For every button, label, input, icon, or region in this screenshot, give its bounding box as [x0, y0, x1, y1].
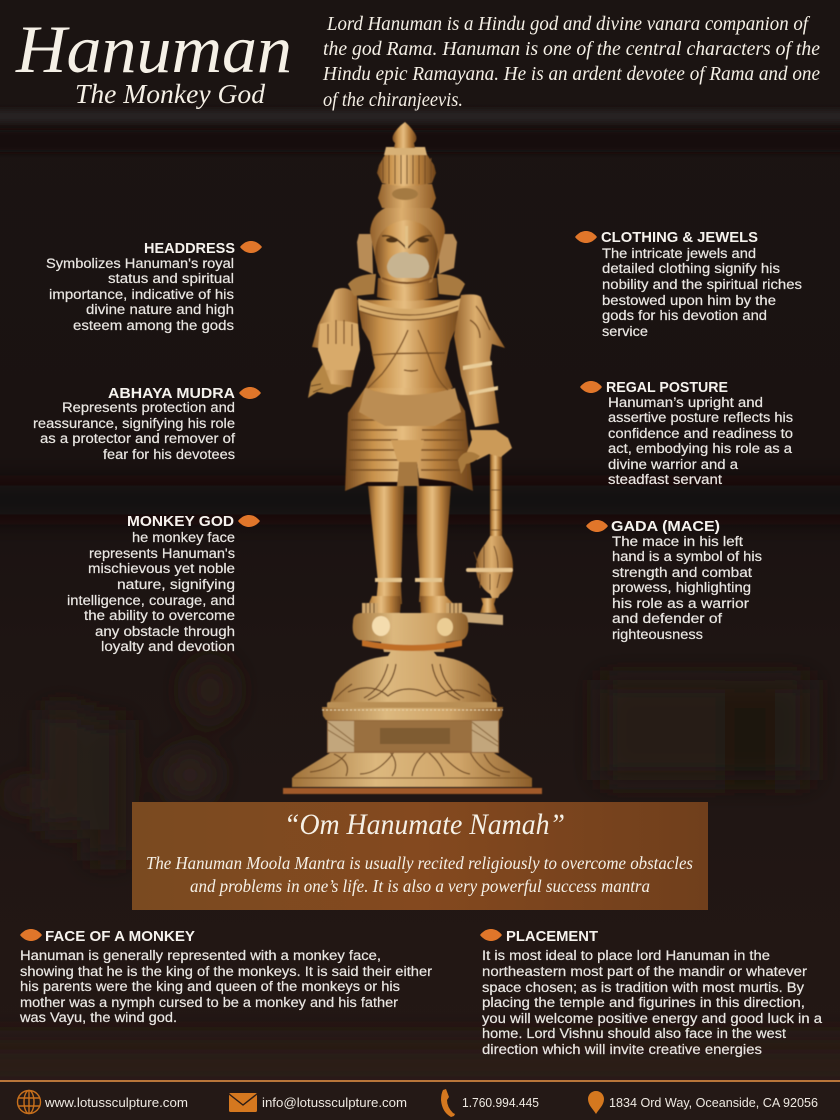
left label: monkey god: MONKEY GOD [127, 513, 234, 530]
bottom section: face of a monkey: mother was a nymph cursed to be a monkey and his father [20, 995, 399, 1010]
left label: abhaya mudra: as a protector and remover of [40, 431, 235, 446]
intro text: Lord Hanuman is a Hindu god and divine vanara companion of [326, 14, 810, 35]
right label: gada mace [586, 518, 762, 642]
bottom section: placement: placing the temple and figurines in this direction, [482, 995, 805, 1010]
bottom section: placement: home. Lord Vishnu should also face in the west [482, 1026, 786, 1041]
icon: lotus leaf [575, 231, 597, 243]
neck [377, 278, 438, 301]
mace [462, 452, 513, 625]
footer contact bar: 1834 Ord Way, Oceanside, CA 92056 [609, 1096, 818, 1110]
icon: phone [441, 1089, 455, 1117]
bottom section: placement: PLACEMENT [506, 928, 598, 945]
bottom section: placement: It is most ideal to place lord Hanuman in the [482, 948, 770, 963]
right label: regal posture: Hanuman’s upright and [608, 395, 763, 410]
right label: regal posture: divine warrior and a [608, 457, 739, 472]
left label: monkey god: any obstacle through [95, 624, 235, 639]
left label: monkey god: intelligence, courage, and [67, 593, 235, 608]
left label: abhaya mudra: Represents protection and [62, 400, 235, 415]
footer contact bar [18, 1089, 818, 1117]
footer contact bar: www.lotussculpture.com [44, 1096, 188, 1110]
right label: clothing and jewels [575, 229, 802, 339]
right label: gada mace: The mace in his left [612, 534, 743, 549]
left label: headdress: HEADDRESS [144, 240, 235, 257]
icon: lotus leaf [239, 387, 261, 399]
left label: abhaya mudra: ABHAYA MUDRA [108, 385, 235, 402]
icon: lotus leaf [240, 241, 262, 253]
left label: abhaya mudra: fear for his devotees [103, 447, 235, 462]
statue: Hanuman bronze [283, 122, 542, 794]
bottom section: face of a monkey: his parents were the king and queen of the monkeys or his [20, 979, 400, 994]
right label: gada mace: and defender of [612, 611, 722, 626]
intro text [322, 14, 820, 111]
icon: lotus leaf [20, 929, 42, 941]
right label: clothing and jewels: detailed clothing signify his [602, 261, 780, 276]
mantra heading: “Om Hanumate Namah” [284, 808, 565, 841]
right side arm and sash [454, 294, 512, 474]
title: Hanuman [15, 11, 292, 87]
bottom section: face of a monkey [19, 928, 433, 1025]
mantra banner: and problems in one’s life. It is also a very powerful success mantra [190, 876, 650, 896]
left label: abhaya mudra: reassurance, signifying his role [33, 416, 235, 431]
bottom section: placement: direction which will invite creative energies [482, 1042, 762, 1057]
icon: lotus leaf [238, 515, 260, 527]
right label: gada mace: his role as a warrior [612, 596, 750, 611]
bottom section: placement: space chosen; as is tradition with most murtis. By [482, 980, 804, 995]
bottom section: placement: you will welcome positive energy and good luck in a [482, 1011, 823, 1026]
torso [357, 298, 462, 390]
right label: regal posture: REGAL POSTURE [606, 379, 728, 396]
left label: abhaya mudra [33, 385, 261, 462]
icon: envelope [229, 1093, 257, 1112]
right label: regal posture: confidence and readiness to [608, 426, 793, 441]
mantra description: The Hanuman Moola Mantra is usually recited religiously to overcome obstacles [146, 853, 693, 873]
bottom section: face of a monkey: showing that he is the king of the monkeys. It is said their either [20, 964, 433, 979]
right label: clothing and jewels: nobility and the spiritual riches [602, 277, 802, 292]
right label: regal posture [580, 379, 793, 487]
mantra banner [132, 802, 708, 910]
intro text: of the chiranjeevis. [323, 90, 463, 111]
left label: headdress: esteem among the gods [73, 318, 234, 333]
footer contact bar: 1.760.994.445 [462, 1096, 539, 1110]
intro text: the god Rama. Hanuman is one of the central characters of the [323, 39, 820, 60]
right label: clothing and jewels: The intricate jewels and [602, 246, 756, 261]
footer rule [0, 1080, 840, 1082]
right label: gada mace: hand is a symbol of his [612, 549, 762, 564]
left label: headdress [46, 240, 262, 333]
head and crown [348, 122, 465, 296]
subtitle: The Monkey God [75, 79, 265, 109]
left label: monkey god: he monkey face [132, 530, 235, 545]
left label: headdress: Symbolizes Hanuman's royal [46, 256, 234, 271]
bottom section: placement [480, 928, 823, 1057]
icon: map pin [588, 1091, 604, 1114]
cloth skirt [345, 388, 473, 491]
right label: regal posture: assertive posture reflects his [608, 410, 793, 425]
right label: regal posture: act, embodying his role as a [608, 441, 793, 456]
bottom section: face of a monkey: FACE OF A MONKEY [45, 928, 195, 945]
left label: headdress: importance, indicative of his [49, 287, 234, 302]
right label: clothing and jewels: bestowed upon him by the [602, 293, 776, 308]
icon: lotus leaf [586, 520, 608, 532]
icon: lotus leaf [580, 381, 602, 393]
raised hand, abhaya mudra [308, 288, 360, 398]
left label: headdress: divine nature and high [86, 302, 234, 317]
left label: monkey god: loyalty and devotion [101, 639, 235, 654]
left label: monkey god: the ability to overcome [84, 608, 235, 623]
pedestal [283, 613, 542, 794]
left label: monkey god: represents Hanuman's [89, 546, 235, 561]
legs and feet [362, 486, 462, 613]
icon: lotus leaf [480, 929, 502, 941]
left label: monkey god: nature, signifying [117, 577, 235, 592]
bottom section: placement: northeastern most part of the mandir or whatever [482, 964, 808, 979]
right label: gada mace: prowess, highlighting [612, 580, 751, 595]
bottom section: face of a monkey: Hanuman is generally represented with a monkey face, [20, 948, 381, 963]
right label: clothing and jewels: CLOTHING & JEWELS [601, 229, 758, 246]
right label: clothing and jewels: gods for his devotion and [602, 308, 767, 323]
left label: monkey god [67, 513, 260, 654]
bottom section: face of a monkey: was Vayu, the wind god. [19, 1010, 177, 1025]
icon: globe [18, 1090, 40, 1114]
right label: gada mace: righteousness [612, 627, 703, 642]
right label: gada mace: strength and combat [612, 565, 752, 580]
right label: regal posture: steadfast servant [608, 472, 722, 487]
right label: clothing and jewels: service [602, 324, 648, 339]
footer contact bar: info@lotussculpture.com [262, 1096, 407, 1110]
left label: headdress: status and spiritual [108, 271, 234, 286]
left label: monkey god: mischievous yet noble [88, 561, 235, 576]
right label: gada mace: GADA (MACE) [611, 518, 720, 535]
intro text: Hindu epic Ramayana. He is an ardent devotee of Rama and one [322, 64, 820, 85]
